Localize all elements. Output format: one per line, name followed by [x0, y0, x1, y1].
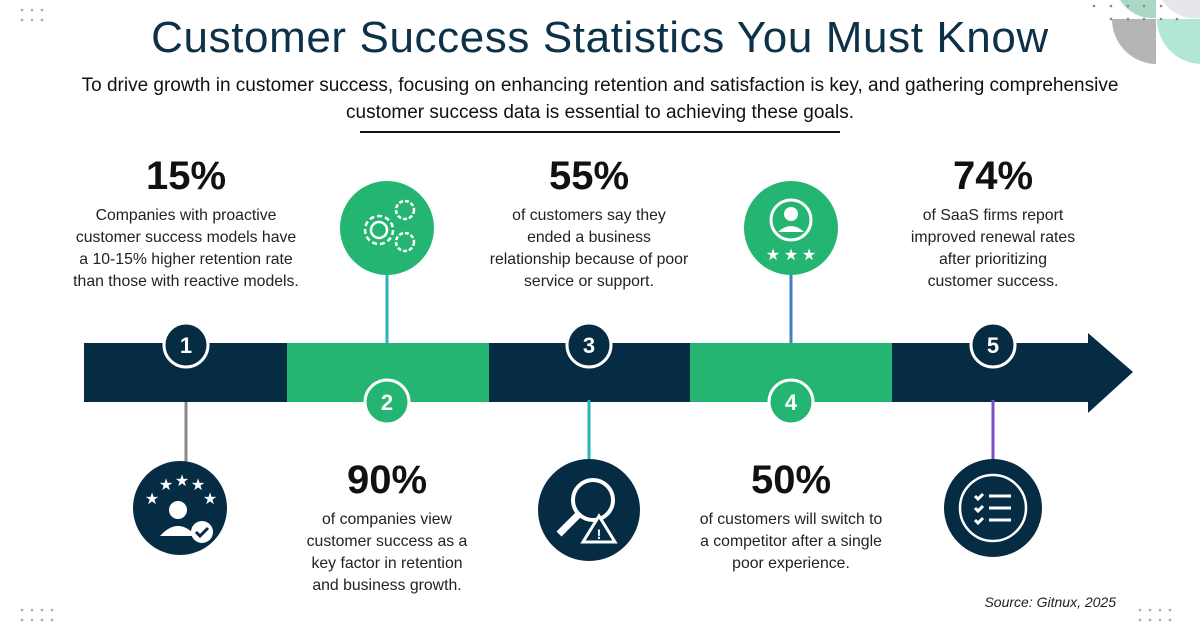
stat 2: 90%	[347, 458, 427, 502]
icon: rating person	[133, 461, 227, 555]
icon: person badge: ★	[766, 247, 780, 264]
icon: rating person: ★	[191, 477, 205, 494]
stat 4	[700, 458, 882, 572]
stat 3	[490, 154, 688, 290]
source: Source: Gitnux, 2025	[984, 594, 1116, 610]
icon: checklist	[944, 459, 1042, 557]
stat 5: customer success.	[928, 273, 1058, 290]
stat 5: 74%	[953, 154, 1033, 198]
stat 4: of customers will switch to	[700, 511, 882, 528]
timeline arrow: 3	[583, 333, 595, 358]
icon: person badge: ★	[802, 247, 816, 264]
stat 3: ended a business	[527, 229, 651, 246]
icon: rating person: ★	[175, 473, 189, 490]
subtitle: To drive growth in customer success, focusing on enhancing retention and satisfaction is key, and gathering comprehensive	[82, 75, 1118, 96]
icon: magnifier warning: !	[597, 526, 601, 542]
stat 4: poor experience.	[732, 555, 850, 572]
icon: magnifier warning	[538, 459, 640, 561]
timeline arrow: 2	[381, 390, 393, 415]
icon: rating person: ★	[145, 491, 159, 508]
stat 5: after prioritizing	[939, 251, 1047, 268]
stat 3: relationship because of poor	[490, 251, 688, 268]
stat 1: Companies with proactive	[96, 207, 276, 224]
icon: rating person: ★	[159, 477, 173, 494]
icon: gears	[340, 181, 434, 275]
stat 2: key factor in retention	[311, 555, 463, 572]
stat 2: of companies view	[322, 511, 452, 528]
stat 5: of SaaS firms report	[923, 207, 1063, 224]
stat 1: 15%	[146, 154, 226, 198]
stat 3: 55%	[549, 154, 629, 198]
icon: person badge	[744, 181, 838, 275]
icon: rating person: ★	[203, 491, 217, 508]
timeline arrow: 5	[987, 333, 999, 358]
subtitle: customer success data is essential to achieving these goals.	[346, 102, 854, 123]
stat 5: improved renewal rates	[911, 229, 1075, 246]
stat 1: a 10-15% higher retention rate	[79, 251, 293, 268]
stat 4: a competitor after a single	[700, 533, 882, 550]
stat 2	[307, 458, 468, 594]
stat 3: service or support.	[524, 273, 654, 290]
stat 3: of customers say they	[512, 207, 666, 224]
icon: person badge: ★	[784, 247, 798, 264]
stat 1	[73, 154, 299, 290]
stat 5	[911, 154, 1075, 290]
stat 1: customer success models have	[76, 229, 296, 246]
stat 2: and business growth.	[312, 577, 462, 594]
timeline arrow: 4	[785, 390, 798, 415]
title: Customer Success Statistics You Must Know	[151, 13, 1049, 62]
subtitle	[82, 75, 1118, 123]
timeline arrow: 1	[180, 333, 192, 358]
stat 4: 50%	[751, 458, 831, 502]
stat 1: than those with reactive models.	[73, 273, 299, 290]
stat 2: customer success as a	[307, 533, 467, 550]
